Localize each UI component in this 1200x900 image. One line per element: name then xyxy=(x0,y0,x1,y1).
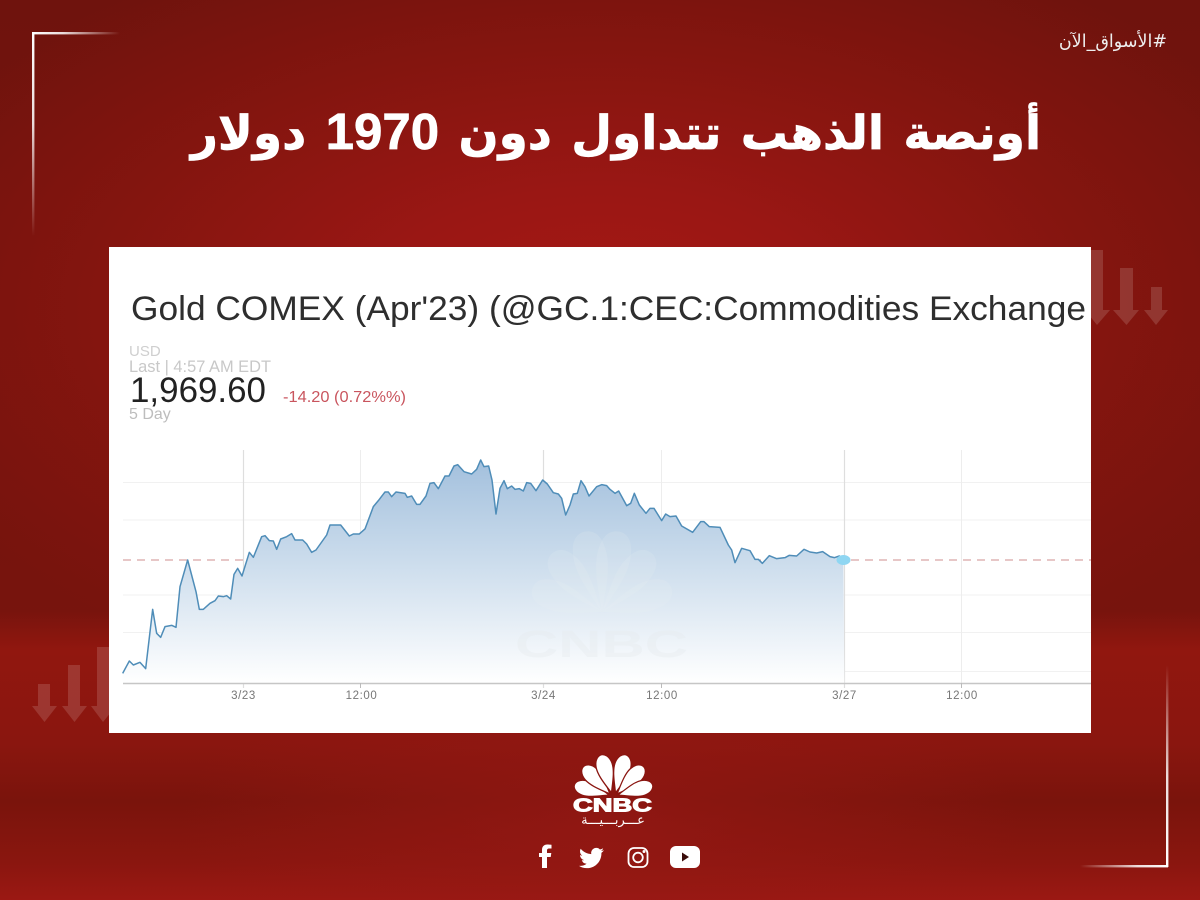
quote block: Last | 4:57 AM EDT xyxy=(129,357,271,376)
x axis labels: 12:00 xyxy=(946,690,978,702)
wordmark: Arabic: عـــربـــيـــة xyxy=(581,813,645,828)
frame corner: top left xyxy=(32,32,120,236)
hashtag: #الأسواق_الآن xyxy=(1059,32,1167,52)
icon: peacock xyxy=(572,753,655,802)
logo: CNBC Arabia xyxy=(572,753,655,828)
social icons xyxy=(539,844,700,868)
x axis labels: 3/27 xyxy=(832,690,857,702)
x axis labels: 3/23 xyxy=(231,690,256,702)
quote block: 1,969.60 xyxy=(130,371,266,410)
icon: youtube xyxy=(670,846,700,868)
quote block: USD xyxy=(129,343,161,360)
line chart: 5 day gold price xyxy=(123,450,1091,688)
icon: facebook xyxy=(539,844,552,868)
chart panel: gold price screenshot xyxy=(109,247,1091,733)
x axis labels xyxy=(231,690,978,702)
x axis labels: 3/24 xyxy=(531,690,556,702)
wordmark: CNBC: CNBC xyxy=(573,796,652,816)
quote block xyxy=(129,343,406,423)
chart heading: Gold COMEX (Apr'23) (@GC.1:CEC:Commodities Exchange xyxy=(131,290,1086,328)
quote block: -14.20 (0.72%%) xyxy=(283,389,406,406)
quote block: 5 Day xyxy=(129,406,171,423)
title: أونصة الذهب تتداول دون 1970 دولار xyxy=(191,103,1041,161)
decorative down arrows: right xyxy=(1085,250,1168,325)
x axis labels: 12:00 xyxy=(346,690,377,702)
decorative down arrows: left xyxy=(32,647,116,722)
watermark: CNBC peacock: CNBC xyxy=(515,624,688,666)
x axis labels: 12:00 xyxy=(646,690,678,702)
frame corner: bottom right xyxy=(1080,665,1168,867)
watermark: CNBC peacock xyxy=(515,528,688,666)
icon: twitter xyxy=(579,848,604,868)
icon: instagram xyxy=(628,848,648,867)
